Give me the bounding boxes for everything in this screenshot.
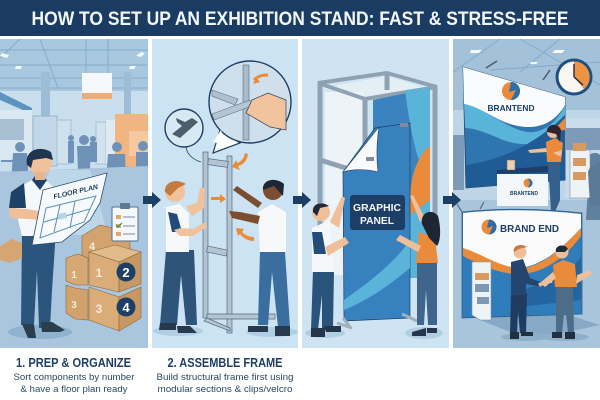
cardboard boxes numbered bbox=[0, 225, 141, 331]
graphic panel label bbox=[350, 195, 405, 230]
panel: finished booths illustration bbox=[453, 39, 600, 348]
floor plan sheet bbox=[32, 173, 107, 245]
bottom booth bbox=[457, 202, 600, 340]
woman at counter bbox=[528, 125, 563, 212]
structural frame bbox=[318, 73, 437, 280]
hanging sign bbox=[82, 73, 112, 99]
panel: graphic panel illustration bbox=[302, 39, 449, 348]
brochure stand bbox=[472, 262, 491, 320]
title banner bbox=[0, 0, 600, 36]
cardboard boxes numbered: 4 bbox=[122, 300, 130, 315]
cardboard boxes numbered: 3 bbox=[71, 300, 77, 311]
visitor silhouette right bbox=[588, 162, 600, 205]
panel: prep and organize illustration bbox=[0, 39, 148, 348]
panel: assemble frame illustration bbox=[152, 39, 298, 348]
right worker bbox=[229, 180, 298, 337]
floor bbox=[0, 166, 148, 348]
literature shelf bbox=[570, 143, 590, 198]
graphic panel label: PANEL bbox=[360, 215, 395, 227]
frame poles bbox=[203, 152, 275, 333]
right worker with panel bbox=[396, 195, 443, 339]
step 1 caption: & have a floor plan ready bbox=[20, 384, 128, 395]
counter desk bbox=[497, 160, 548, 206]
clipboard checklist bbox=[112, 203, 138, 241]
cardboard boxes numbered: 2 bbox=[122, 265, 130, 280]
brand end logo bbox=[482, 220, 559, 235]
step 1 caption: 1. PREP & ORGANIZE bbox=[16, 356, 131, 370]
arrow: step 2 to 3 bbox=[293, 192, 311, 208]
orange direction arrows bbox=[211, 153, 254, 241]
step 2 caption bbox=[156, 356, 294, 395]
left worker with panel bbox=[305, 196, 349, 338]
step 1 caption bbox=[14, 356, 134, 395]
step 2 caption: modular sections & clips/velcro bbox=[158, 384, 292, 395]
step 2 caption: 2. ASSEMBLE FRAME bbox=[168, 356, 282, 370]
arrow: step 3 to 4 bbox=[443, 192, 461, 208]
top booth backwall bbox=[463, 61, 565, 188]
cardboard boxes numbered: 4 bbox=[89, 241, 96, 253]
step 2 caption: Build structural frame first using bbox=[156, 372, 294, 383]
orange exhibit stand bbox=[115, 114, 148, 194]
exhibition hall background bbox=[0, 39, 148, 348]
cardboard boxes numbered: 3 bbox=[96, 302, 103, 316]
step arrows bbox=[143, 192, 461, 208]
counter desk: BRANTEND bbox=[510, 191, 538, 197]
brand end logo: BRAND END bbox=[500, 224, 559, 235]
clock bbox=[556, 58, 592, 96]
hall ceiling and floor bbox=[453, 39, 600, 348]
cardboard boxes numbered: 1 bbox=[96, 266, 103, 280]
left worker bbox=[153, 181, 207, 336]
step 1 caption: Sort components by number bbox=[14, 372, 134, 383]
graphic panel label: GRAPHIC bbox=[353, 202, 401, 214]
floor plan sheet: FLOOR PLAN bbox=[53, 184, 100, 201]
handshake people bbox=[501, 245, 592, 341]
brantend logo top: BRANTEND bbox=[488, 103, 534, 113]
person holding floor plan bbox=[8, 149, 72, 339]
peeled graphic sheet bbox=[343, 123, 410, 321]
arrow: step 1 to 2 bbox=[143, 192, 161, 208]
crowd silhouettes bbox=[1, 135, 148, 198]
magnified connection bubble bbox=[209, 61, 291, 153]
cardboard boxes numbered: 1 bbox=[71, 270, 77, 281]
brantend logo top bbox=[488, 82, 534, 113]
panel stand feet bbox=[337, 314, 417, 328]
blue graphic panel bbox=[373, 88, 430, 278]
velcro clip detail bubble bbox=[165, 109, 203, 162]
